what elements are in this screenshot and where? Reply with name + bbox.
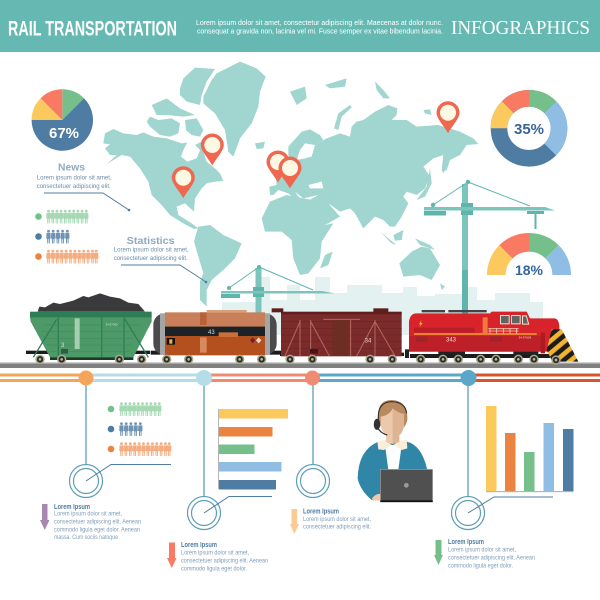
hopper wagon: 34 87009 [105,322,118,326]
statistics text: Lorem ipsum dolor sit amet, [114,246,189,254]
statistics text: consectetuer adipiscing elit. [114,255,188,262]
pie chart 67%: 67% [49,125,79,142]
arrow green [434,540,443,565]
collar [377,440,407,450]
face shadow [393,408,404,444]
donut chart 35% [499,98,559,158]
milestone circle 1 [70,464,102,498]
header description: Lorem ipsum dolor sit amet, consectetur adipiscing elit. Maecenas at dolor nunc. [196,18,443,27]
hopper wagon [26,293,152,364]
hair [378,400,407,432]
red locomotive [405,310,578,365]
text block 4: Lorem ipsum dolor sit amet, [448,546,516,554]
timeline [0,370,600,497]
world map [103,62,478,307]
text block 1: Lorem Ipsum [54,502,90,511]
text block 2 [181,540,268,572]
small crane [221,265,335,313]
text block 3 [303,506,371,530]
infographics label: INFOGRAPHICS [451,17,590,39]
text block 1: massa. Cum sociis natoque [54,534,118,541]
news text [37,162,112,190]
shirt [385,445,402,470]
oceania [399,238,445,290]
text block 3: Lorem ipsum dolor sit amet, [303,516,371,523]
africa and south america [194,195,403,307]
milestone circle 3 [296,464,330,498]
half donut chart 18%: 18% [515,262,544,278]
news leader line [44,193,130,211]
red locomotive: 343 [446,338,457,344]
text block 2: Lorem Ipsum [181,540,217,549]
text block 3: Lorem Ipsum [303,506,339,516]
milestone circle 4 [452,496,484,530]
tank wagon [151,310,282,364]
news text: Lorem ipsum dolor sit amet, [37,174,112,182]
red locomotive: 34 87009 [519,336,531,340]
tank wagon: 43 [208,330,215,336]
eurasia [269,78,478,228]
leader lines [86,464,553,513]
news text: News [58,162,85,174]
people chart upper [35,210,98,264]
laptop [380,469,433,502]
headset [374,402,407,435]
milestone circle 2 [188,496,220,530]
text block 1: consectetuer adipiscing elit. Aenean [54,518,141,526]
text block 4 [448,537,535,570]
operator with headset and laptop [358,400,433,502]
arrow peach [290,509,299,534]
text block 4: commodo ligula eget dolor. [448,562,513,570]
hand [372,494,380,501]
arrow purple [40,504,50,530]
statistics leader line [121,265,207,283]
header description [196,18,443,36]
title: RAIL TRANSPORTATION [8,18,177,40]
text block 2: consectetuer adipiscing elit. Aenean [181,558,268,564]
head [381,408,404,444]
box wagon: 34 [365,339,372,345]
north america and greenland [103,62,266,229]
text block 4: consectetuer adipiscing elit. Aenean [448,554,535,562]
box wagon [272,308,404,364]
arrow red [167,542,176,568]
text block 1 [54,502,141,541]
header band [0,0,600,52]
donut chart 35%: 35% [514,121,544,138]
statistics text [114,236,189,262]
half donut chart 18% [496,242,562,278]
text block 1: commodo ligula eget dolor. Aenean [54,526,140,534]
hopper wagon: 3 [61,343,65,349]
city skyline [222,277,543,335]
jacket [358,442,432,500]
header description: consequat a gravida non, lacinia vel mi. Fusce semper ex vitae bibendum lacinia. [197,26,443,36]
pie chart 67% [32,89,93,151]
vertical bar chart [486,406,574,492]
map pins [172,101,460,198]
text block 2: commodo ligula eget dolor. [181,566,247,572]
news text: consectetuer adipiscing elit. [37,183,111,190]
text block 2: Lorem ipsum dolor sit amet, [181,550,249,556]
horizontal bar chart [218,409,288,490]
large crane [424,180,555,315]
text block 4: Lorem Ipsum [448,537,484,546]
text block 1: Lorem ipsum dolor sit amet, [54,510,122,518]
statistics text: Statistics [127,236,175,247]
people chart lower [108,402,171,456]
rail track [0,362,600,368]
text block 3: consectetuer adipiscing elit. [303,524,371,530]
